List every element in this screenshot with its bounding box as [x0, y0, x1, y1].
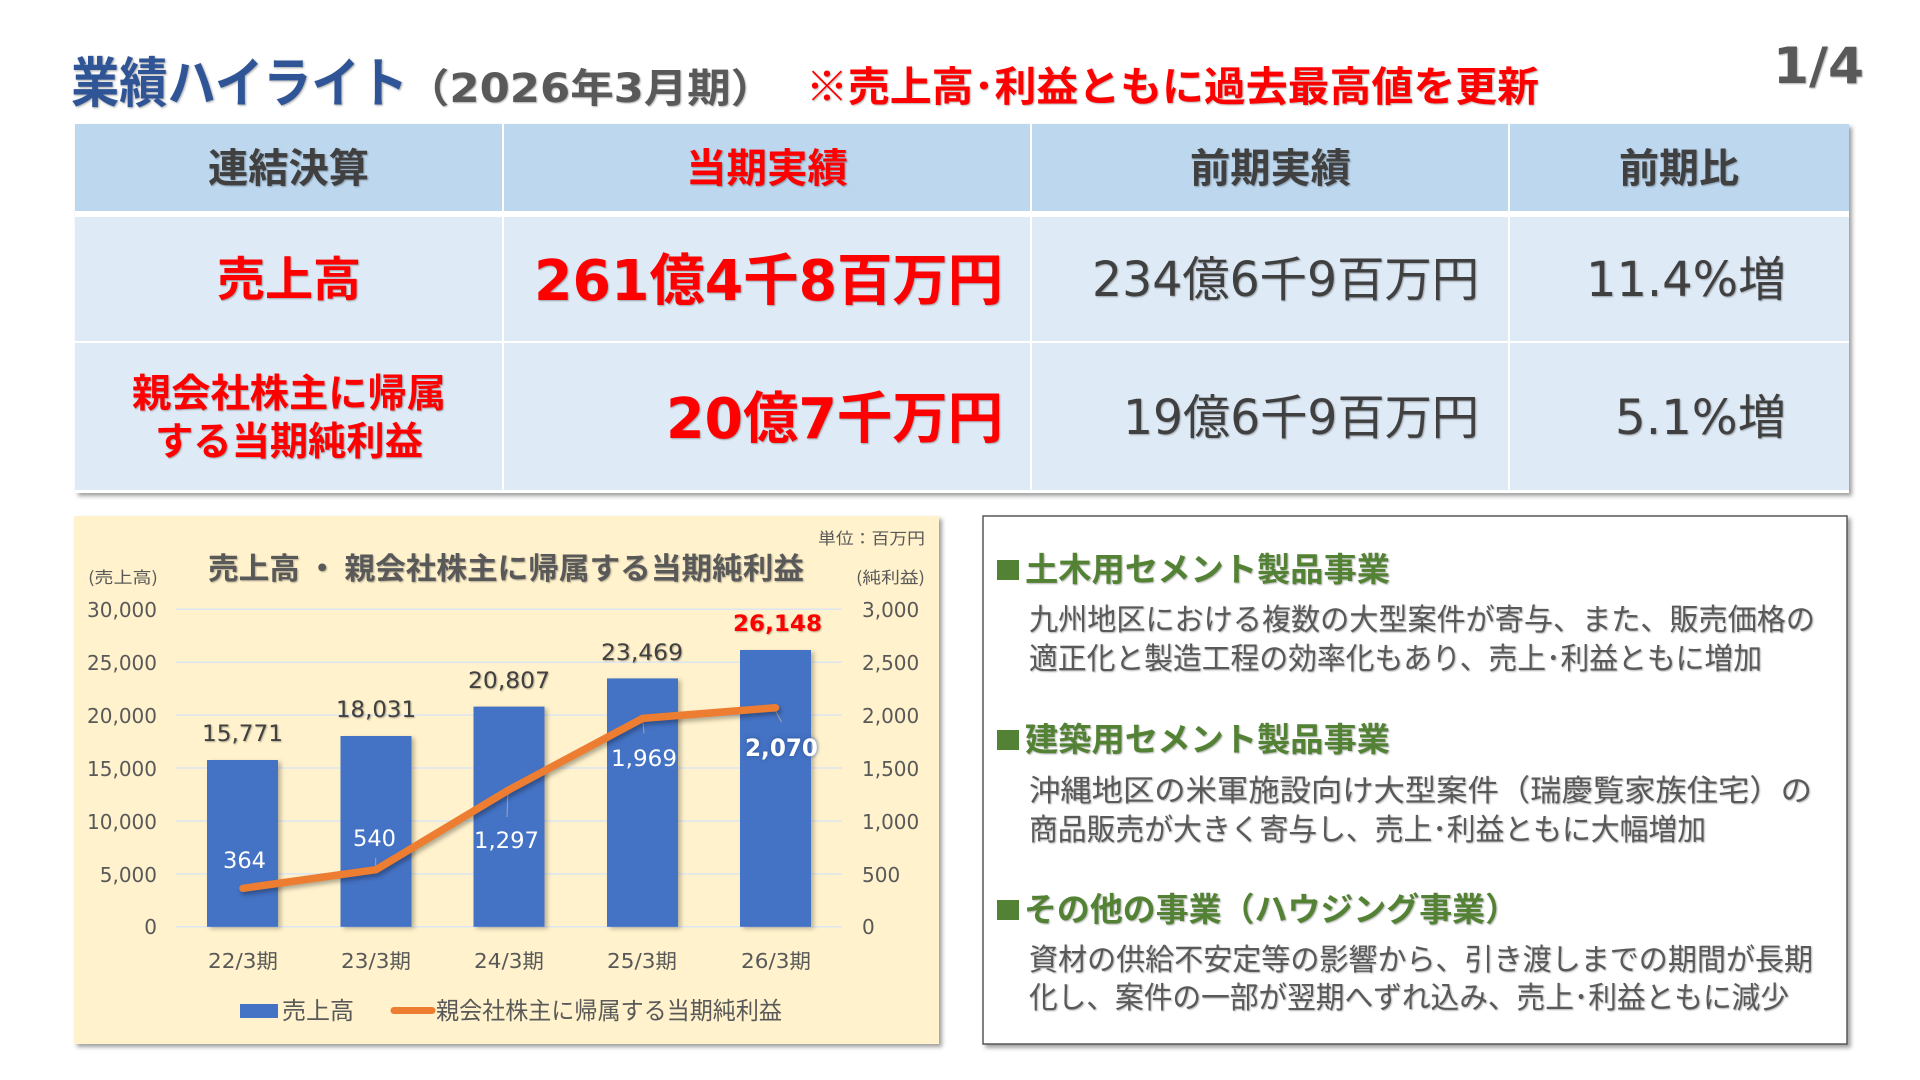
legend: 売上高: 売上高 — [282, 991, 354, 1026]
value: net income change: 5.1%増 — [1615, 390, 1786, 446]
right axis labels: 1,500 — [862, 757, 919, 781]
highlighted line label: 2,070: 2,070 — [745, 734, 818, 762]
bar data labels: 15,771 — [202, 722, 283, 747]
line data labels: 540 — [353, 827, 396, 852]
legend: bar swatch — [240, 1004, 278, 1018]
leader lines — [376, 710, 782, 869]
right axis labels: 2,000 — [862, 704, 919, 728]
value: current sales: 261億4千8百万円 — [534, 249, 1003, 314]
segment 1 text: 九州地区における複数の大型案件が寄与、また、販売価格の — [1029, 595, 1815, 639]
left axis labels — [87, 598, 157, 939]
line series: 親会社株主に帰属する当期純利益 — [243, 708, 776, 888]
bar data labels: 20,807 — [468, 669, 550, 694]
right axis labels: 1,000 — [862, 810, 919, 834]
legend — [240, 991, 782, 1026]
header: 当期実績: 当期実績 — [686, 136, 848, 194]
bar data labels: 23,469 — [601, 641, 683, 666]
segment 1 bullet — [997, 560, 1019, 580]
subtitle: fiscal period: （2026年3月期） — [406, 66, 774, 112]
category labels: 22/3期 — [208, 949, 278, 973]
highlighted bar label: 26,148: 26,148 — [733, 612, 822, 637]
bar data labels: 18,031 — [336, 698, 416, 723]
segment 3 text — [1029, 935, 1813, 1017]
row label: 親会社株主に帰属する当期純利益 — [132, 363, 446, 467]
category labels: 25/3期 — [607, 949, 677, 973]
category labels — [208, 949, 811, 973]
panel: chart — [74, 516, 939, 1044]
row label: 売上高: 売上高 — [217, 241, 361, 310]
left axis labels: 10,000 — [87, 810, 157, 834]
segment 2 heading: 建築用セメント製品事業 — [1025, 713, 1390, 761]
category labels: 24/3期 — [474, 949, 544, 973]
right axis title: (純利益) — [856, 564, 925, 588]
headline note: record high: ※売上高･利益ともに過去最高値を更新 — [806, 53, 1539, 113]
page number: 1/4 — [1773, 37, 1864, 95]
left axis labels: 20,000 — [87, 704, 157, 728]
line data labels: 364 — [223, 849, 266, 874]
panel: results table — [75, 124, 1849, 493]
row label: 親会社株主に帰属する当期純利益: する当期純利益 — [155, 411, 423, 467]
segment 1: 土木用セメント製品事業 — [997, 543, 1815, 678]
segments frame — [983, 516, 1847, 1044]
chart background — [74, 516, 939, 1044]
segment 1 text — [1029, 595, 1815, 678]
segment 2 text: 商品販売が大きく寄与し、売上･利益ともに大幅増加 — [1029, 805, 1706, 849]
table background with shadow — [75, 124, 1849, 493]
table body rows — [75, 217, 1849, 490]
category labels: 26/3期 — [741, 949, 811, 973]
segment 3 bullet — [997, 900, 1019, 920]
legend: line swatch — [394, 1007, 432, 1014]
segment 2 bullet — [997, 730, 1019, 750]
left axis labels: 25,000 — [87, 651, 157, 675]
right axis labels: 2,500 — [862, 651, 919, 675]
left axis title: (売上高) — [88, 564, 158, 588]
header: 前期比: 前期比 — [1619, 136, 1739, 194]
right axis labels — [862, 598, 919, 939]
line data labels: 1,297 — [474, 829, 539, 854]
segment 3 heading: その他の事業（ハウジング事業） — [1024, 883, 1518, 931]
left axis labels: 15,000 — [87, 757, 157, 781]
panel: business segments — [983, 516, 1847, 1044]
segment 2 text: 沖縄地区の米軍施設向け大型案件（瑞慶覧家族住宅）の — [1029, 766, 1812, 810]
value: previous sales: 234億6千9百万円 — [1092, 252, 1479, 308]
value: sales change: 11.4%増 — [1586, 252, 1786, 308]
table header row — [75, 124, 1849, 211]
category labels: 23/3期 — [341, 949, 411, 973]
segment 1 heading: 土木用セメント製品事業 — [1025, 543, 1390, 591]
header: 前期実績: 前期実績 — [1190, 136, 1351, 194]
left axis labels: 30,000 — [87, 598, 157, 622]
segment 2: 建築用セメント製品事業 — [997, 713, 1812, 849]
segment 3 text: 資材の供給不安定等の影響から、引き渡しまでの期間が長期 — [1029, 935, 1813, 979]
segment 3: その他の事業 — [997, 883, 1813, 1017]
line data labels: 1,969 — [611, 747, 677, 772]
value: previous net income: 19億6千9百万円 — [1123, 390, 1479, 446]
right axis labels: 500 — [862, 863, 900, 887]
row label: 親会社株主に帰属する当期純利益: 親会社株主に帰属 — [132, 363, 446, 419]
left axis labels: 0 — [144, 915, 157, 939]
left axis labels: 5,000 — [100, 863, 157, 887]
segment 2 text — [1029, 766, 1812, 849]
value: current net income: 20億7千万円 — [666, 387, 1003, 452]
chart title: 売上高 ・ 親会社株主に帰属する当期純利益 — [208, 544, 804, 588]
right axis labels: 0 — [862, 915, 875, 939]
bar series: 売上高 — [207, 650, 811, 927]
chart unit note: 単位：百万円 — [818, 525, 925, 549]
segment 3 text: 化し、案件の一部が翌期へずれ込み、売上･利益ともに減少 — [1029, 973, 1789, 1017]
title: 業績ハイライト: 業績ハイライト — [71, 39, 408, 118]
bar data labels — [202, 641, 683, 747]
header: 連結決算: 連結決算 — [208, 136, 369, 194]
line data labels — [223, 747, 677, 874]
right axis labels: 3,000 — [862, 598, 919, 622]
legend: 親会社株主に帰属する当期純利益: 親会社株主に帰属する当期純利益 — [436, 991, 782, 1026]
segment 1 text: 適正化と製造工程の効率化もあり、売上･利益ともに増加 — [1029, 634, 1762, 678]
